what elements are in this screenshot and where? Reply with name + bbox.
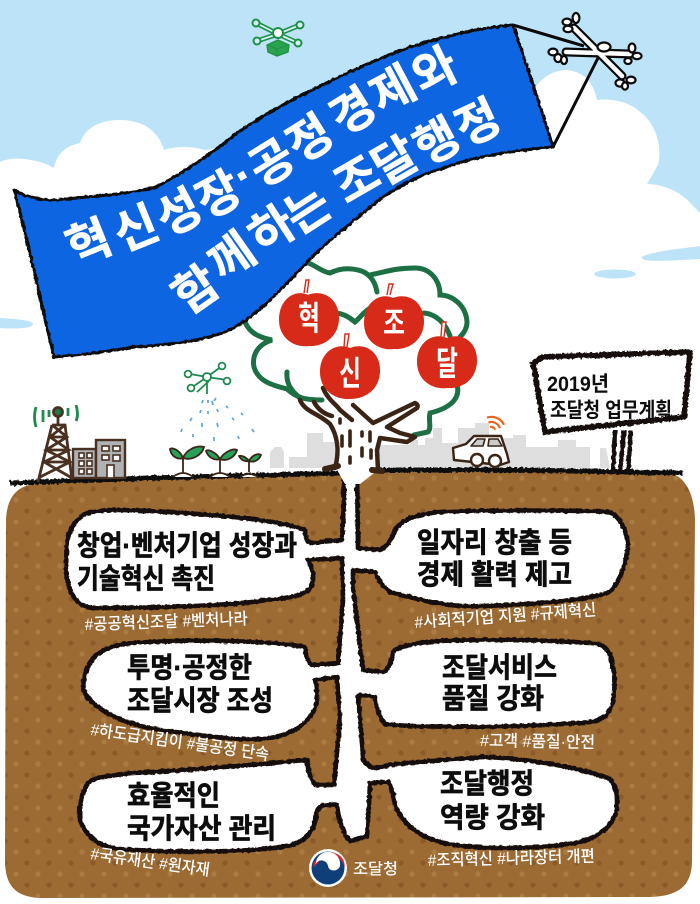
- apple: 달: [417, 322, 477, 388]
- banner headline: 신: [106, 196, 166, 261]
- bubble 1 text: 기술혁신 촉진: [77, 563, 215, 594]
- bubble 6 text: 역량 강화: [440, 802, 545, 833]
- bubble 2 text: 투명·공정한: [127, 652, 252, 683]
- bubble 4 text: 일자리 창출 등: [417, 527, 572, 558]
- ground line: [10, 470, 683, 483]
- sprinkler drone: [185, 363, 230, 394]
- banner headline: 는: [275, 176, 340, 244]
- apple: 신: [320, 334, 380, 399]
- bubble 1 text: 창업·벤처기업 성장과: [77, 530, 297, 561]
- bubble 6 hashtags: #조직혁신 #나라장터 개편: [428, 847, 595, 870]
- banner headline: 조: [325, 146, 389, 213]
- apple: 달: 달: [436, 345, 458, 383]
- banner headline: 정: [447, 89, 509, 156]
- bubble 5 hashtags: #고객 #품질·안전: [480, 731, 595, 752]
- connected car: [453, 436, 509, 467]
- bubble 4 text: [417, 527, 572, 590]
- water spray: [181, 398, 254, 441]
- bubble 1 hashtags: #공공혁신조달 #벤처나라: [84, 609, 248, 634]
- banner headline: 혁: [59, 210, 119, 275]
- banner headline: 행: [405, 108, 468, 175]
- banner headline: 께: [199, 222, 265, 291]
- banner headline: 공: [239, 129, 304, 197]
- city skyline: [270, 423, 610, 470]
- buildings: [73, 440, 125, 478]
- apple: 신: 신: [339, 355, 361, 393]
- bubble 3 hashtags: #국유재산 #원자재: [89, 844, 211, 880]
- signboard: 조달청 업무계획: [550, 399, 672, 422]
- seedlings: [170, 447, 261, 477]
- banner headline: 함: [163, 255, 229, 324]
- government logo: [309, 849, 347, 887]
- bubble 2 text: [127, 652, 273, 716]
- bubble 5 text: 품질 강화: [442, 683, 544, 714]
- bubble 3 text: [127, 780, 276, 844]
- tow strings: [513, 25, 598, 147]
- soil: [5, 471, 695, 898]
- signboard: [533, 352, 690, 473]
- bubble 1 text: [77, 530, 297, 594]
- banner headline: [59, 37, 509, 324]
- bubble 3 text: 효율적인: [127, 780, 220, 811]
- bubble 4 hashtags: #사회적기업 지원 #규제혁신: [414, 600, 597, 632]
- bubble 6 text: 조달행정: [440, 768, 534, 799]
- banner headline: 장: [187, 161, 250, 228]
- banner headline: ·: [223, 148, 263, 201]
- signboard: 2019년: [547, 373, 609, 396]
- bubble 3 text: 국가자산 관리: [127, 813, 276, 844]
- cloud flecks: [0, 246, 700, 329]
- banner headline: 제: [361, 56, 424, 123]
- bubble 6 text: [440, 768, 545, 833]
- green delivery drone: [252, 20, 304, 56]
- banner headline: 성: [147, 179, 210, 246]
- underground tunnels and bubbles: [66, 468, 628, 851]
- bubble 2 hashtags: #하도급지킴이 #불공정 단속: [89, 720, 270, 764]
- tree trunk: [300, 388, 418, 484]
- tree canopy: [243, 263, 467, 435]
- signal tower: [34, 405, 78, 482]
- banner headline: 달: [363, 127, 427, 194]
- apple: 조: [364, 284, 424, 349]
- banner headline: 정: [277, 105, 342, 173]
- banner: [14, 25, 553, 357]
- apple: 혁: 혁: [298, 300, 320, 338]
- bubble 4 text: 경제 활력 제고: [417, 559, 572, 590]
- apple: 조: 조: [383, 306, 405, 341]
- banner headline: 와: [404, 37, 466, 104]
- banner headline: 하: [239, 196, 304, 264]
- logo wordmark: 조달청: [353, 860, 398, 878]
- banner headline: 경: [320, 78, 385, 146]
- white plane drone: [548, 13, 642, 90]
- bubble 5 text: [442, 652, 557, 714]
- wifi signal: [487, 413, 505, 431]
- bubble 2 text: 조달시장 조성: [127, 685, 273, 716]
- bubble 5 text: 조달서비스: [442, 652, 557, 683]
- apple: 혁: [279, 280, 339, 346]
